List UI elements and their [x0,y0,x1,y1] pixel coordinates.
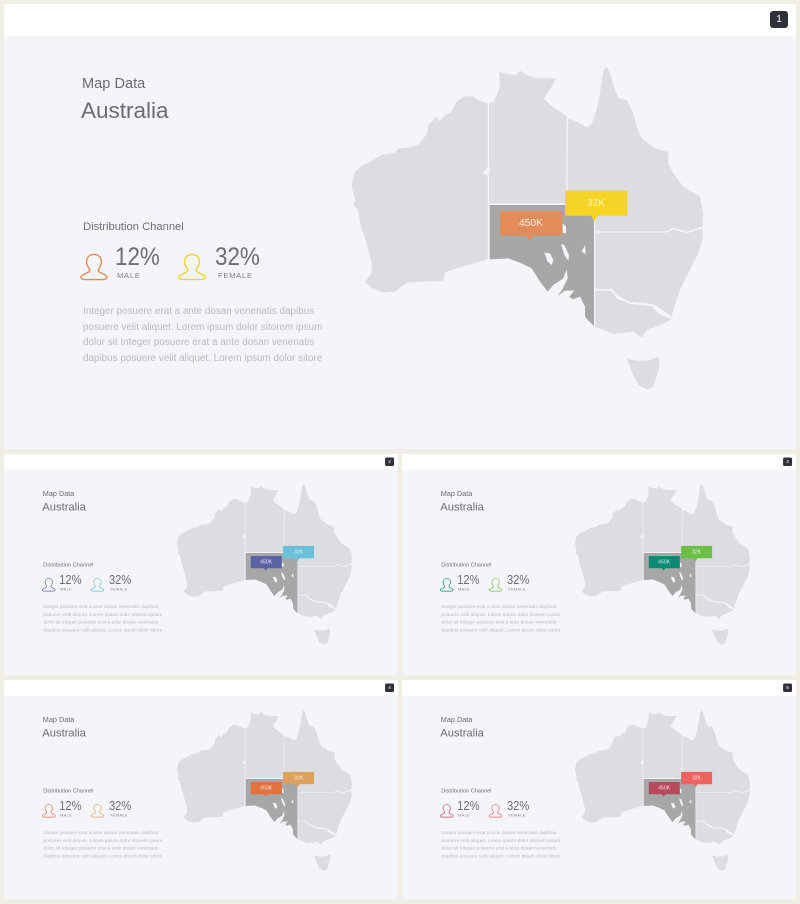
slide 2: blue [4,454,398,675]
heading: Map Data: Map Data [43,716,74,724]
body text: posuere velit aliquet. Lorem ipsum dolor sitorem ipsum [441,838,560,843]
male label: MALE [458,587,470,591]
heading: Map Data: Map Data [441,490,472,498]
callout: 32K [681,546,712,561]
heading: Map Data: Map Data [82,76,145,92]
header bar with page number: 4 [388,685,391,690]
heading: Map Data: Map Data [43,490,74,498]
body text: Integer posuere erat a ante dosan venenatis dapibus [83,306,314,317]
body text: Integer posuere erat a ante dosan venenatis dapibus [441,604,556,610]
callout: 32K: 32K [692,776,702,782]
map of Australia with callouts [177,710,352,871]
callout: 450K: 450K [519,218,543,229]
body text: dolor sit Integer posuere erat a ante dosan venenatis [441,846,556,851]
body text: Integer posuere erat a ante dosan venenatis dapibus [441,830,556,836]
heading: Australia: Australia [81,98,169,123]
header bar with page number [402,454,796,470]
body text: posuere velit aliquet. Lorem ipsum dolor sitorem ipsum [43,612,162,617]
callout: 450K [649,782,680,797]
header bar with page number: 3 [786,459,789,464]
callout: 450K: 450K [658,785,671,791]
female label: FEMALE [218,271,253,280]
slide 4: orange [4,680,398,899]
map of Australia with callouts [575,484,750,645]
body text [43,604,162,633]
body text: dolor sit Integer posuere erat a ante dosan venenatis [441,620,556,625]
female percentage: 32% [215,242,260,270]
callout: 450K [500,211,562,241]
icon: male [440,804,454,818]
body text [441,830,560,859]
header bar with page number [402,680,796,696]
body text: Integer posuere erat a ante dosan venenatis dapibus [43,830,158,836]
slide 3: green [402,454,796,675]
body text [43,830,162,859]
male label: MALE [60,587,72,591]
male percentage: 12% [457,573,480,587]
callout: 450K [649,556,680,571]
female percentage: 32% [507,573,529,587]
icon: male [42,804,56,818]
subheading: Distribution Channel [43,562,93,568]
callout: 32K: 32K [692,550,702,556]
body text: dolor sit Integer posuere erat a ante dosan venenatis [83,337,314,348]
icon: male [42,578,56,592]
male percentage: 12% [59,573,82,587]
callout: 32K [681,772,712,787]
header bar with page number [4,4,796,36]
body text: dapibus posuere velit aliquet. Lorem ipsum dolor sitore [83,353,322,364]
callout: 32K: 32K [294,776,304,782]
body text: dapibus posuere velit aliquet. Lorem ipsum dolor sitore [43,854,162,859]
body text: dapibus posuere velit aliquet. Lorem ipsum dolor sitore [441,628,560,633]
body text [441,604,560,633]
callout: 450K [251,556,282,571]
header bar with page number [4,680,398,696]
body text: posuere velit aliquet. Lorem ipsum dolor sitorem ipsum [43,838,162,843]
male label: MALE [458,813,470,817]
male percentage: 12% [457,799,480,813]
female label: FEMALE [110,813,128,817]
subheading: Distribution Channel [441,562,491,568]
subheading: Distribution Channel [43,788,93,794]
map of Australia with callouts [352,67,704,390]
callout: 450K: 450K [260,785,273,791]
female percentage: 32% [109,799,131,813]
icon: female [488,578,502,592]
callout: 32K [565,191,627,222]
body text [83,306,322,364]
female label: FEMALE [110,587,128,591]
map of Australia with callouts [177,484,352,645]
header bar with page number [4,454,398,470]
body text: dolor sit Integer posuere erat a ante dosan venenatis [43,846,158,851]
callout: 450K [251,782,282,797]
subheading: Distribution Channel [441,788,491,794]
icon: male [440,578,454,592]
callout: 450K: 450K [260,559,273,565]
body text: posuere velit aliquet. Lorem ipsum dolor sitorem ipsum [441,612,560,617]
icon: male [80,254,108,280]
male label: MALE [60,813,72,817]
body text: dapibus posuere velit aliquet. Lorem ipsum dolor sitore [441,854,560,859]
callout: 450K: 450K [658,559,671,565]
icon: female [90,578,104,592]
map of Australia with callouts [575,710,750,871]
icon: female [90,804,104,818]
male label: MALE [117,271,141,280]
female label: FEMALE [508,813,526,817]
heading: Australia: Australia [42,501,86,513]
male percentage: 12% [59,799,82,813]
female percentage: 32% [109,573,131,587]
callout: 32K [283,546,314,561]
heading: Map Data: Map Data [441,716,472,724]
female percentage: 32% [507,799,529,813]
heading: Australia: Australia [440,501,484,513]
heading: Australia: Australia [440,727,484,739]
subheading: Distribution Channel [83,221,184,233]
header bar with page number: 1 [776,14,782,25]
slide 5: red [402,680,796,899]
body text: dapibus posuere velit aliquet. Lorem ipsum dolor sitore [43,628,162,633]
callout: 32K [283,772,314,787]
callout: 32K: 32K [294,550,304,556]
body text: Integer posuere erat a ante dosan venenatis dapibus [43,604,158,610]
male percentage: 12% [115,242,160,270]
heading: Australia: Australia [42,727,86,739]
icon: female [488,804,502,818]
icon: female [178,254,206,280]
header bar with page number: 5 [786,685,789,690]
female label: FEMALE [508,587,526,591]
body text: dolor sit Integer posuere erat a ante dosan venenatis [43,620,158,625]
body text: posuere velit aliquet. Lorem ipsum dolor sitorem ipsum [83,322,322,333]
header bar with page number: 2 [388,459,391,464]
slide 1: main [4,4,796,449]
callout: 32K: 32K [587,198,605,209]
